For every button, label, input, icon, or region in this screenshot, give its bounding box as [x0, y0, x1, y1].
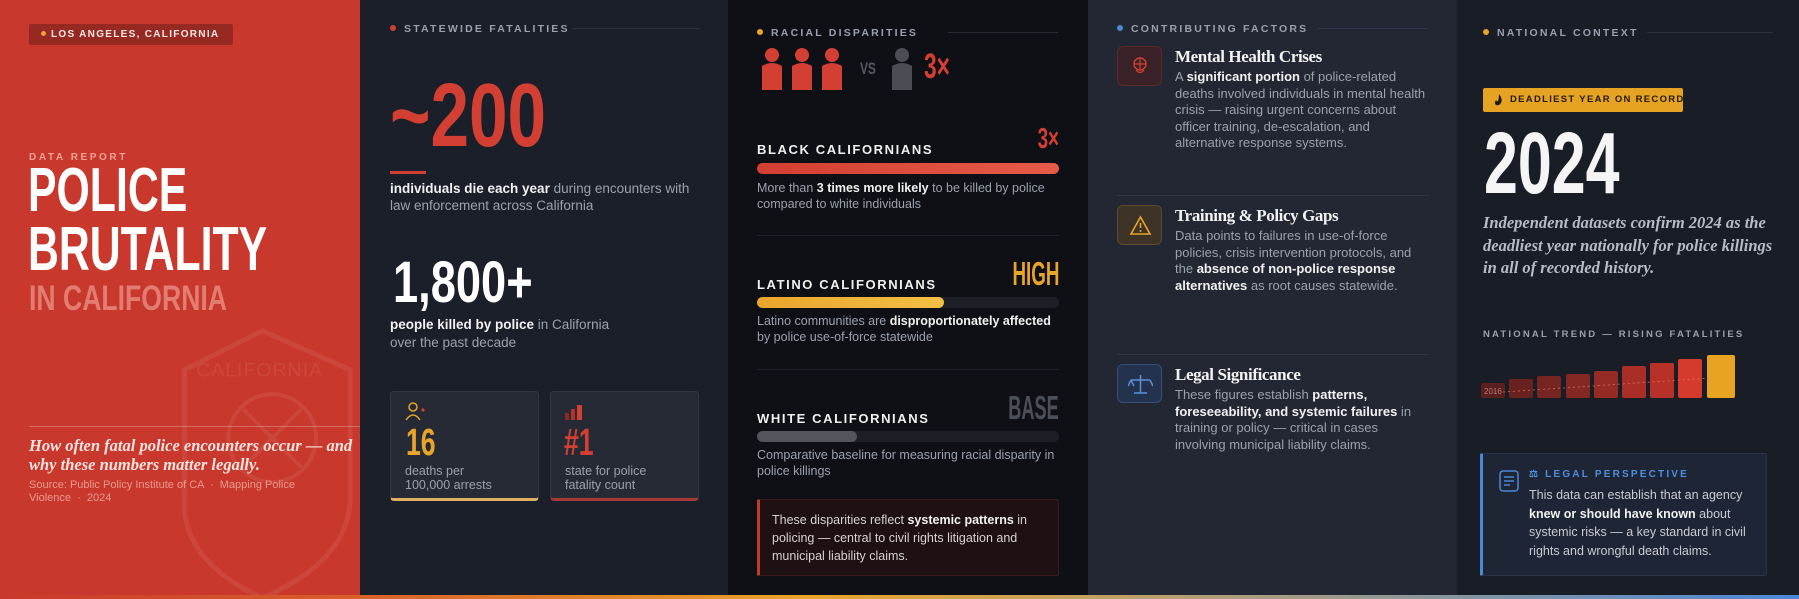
section label: STATEWIDE FATALITIES — [404, 23, 570, 35]
row: white californians: Comparative baseline for measuring racial disparity in police killings — [757, 448, 1054, 478]
badge: deadliest year: DEADLIEST YEAR ON RECORD — [1510, 94, 1685, 105]
icon: person — [405, 402, 425, 420]
stat description — [390, 317, 610, 350]
panel: national context — [1457, 0, 1799, 599]
big number ~200: ~200 — [390, 66, 546, 166]
section label: RACIAL DISPARITIES — [771, 27, 918, 39]
title — [28, 156, 267, 284]
row: latino californians: LATINO CALIFORNIANS — [757, 277, 937, 292]
icon: document — [1499, 470, 1519, 492]
icon: bars — [565, 405, 582, 420]
section label: CONTRIBUTING FACTORS — [1131, 23, 1308, 35]
callout: systemic patterns: These disparities reflect systemic patterns in policing — central to civil rights litigation and municipal liability claims. — [772, 513, 1027, 563]
tagline: How often fatal police encounters occur — and why these numbers matter legally. — [29, 436, 352, 474]
card: #1 state: state for police — [565, 464, 646, 478]
subtitle: IN CALIFORNIA — [29, 279, 227, 318]
stat description: people killed by police in California — [390, 317, 609, 332]
factor: training gaps — [1117, 205, 1411, 292]
title: BRUTALITY — [28, 215, 267, 284]
badge watermark: CALIFORNIA — [196, 360, 323, 382]
card: deaths per arrests: deaths per — [405, 464, 464, 478]
big number 1,800+: 1,800+ — [393, 250, 533, 315]
callout: legal perspective: This data can establish that an agency knew or should have known about systemic risks — a key standard in civil rights and wrongful death claims. — [1529, 488, 1746, 558]
panel: statewide fatalities — [360, 0, 728, 599]
factor: training gaps: Data points to failures in use-of-force policies, crisis intervention protocols, and the absence of non-police response alternatives as root causes statewide. — [1175, 228, 1411, 292]
icon: people comparison: 3× — [924, 47, 950, 86]
row: white californians — [757, 389, 1059, 478]
big number 2024: 2024 — [1484, 115, 1619, 212]
icon: people comparison: VS — [860, 60, 876, 79]
card: deaths per arrests — [390, 391, 539, 501]
factor: legal significance: Legal Significance — [1175, 365, 1300, 384]
panel: red title panel — [0, 0, 360, 599]
card: deaths per arrests: 16 — [406, 422, 436, 464]
stat description: individuals die each year during encounters with law enforcement across California — [390, 181, 689, 213]
row: latino californians: HIGH — [1012, 255, 1059, 292]
card: #1 state: #1 — [564, 422, 594, 464]
title: POLICE — [28, 156, 187, 225]
factor: legal significance — [1117, 364, 1411, 452]
factor: training gaps: Training & Policy Gaps — [1175, 206, 1338, 225]
location tag: LOS ANGELES, CALIFORNIA — [51, 29, 219, 40]
factor: legal significance: These figures establish patterns, foreseeability, and systemic failures in training or policy — critical in cases involving municipal liability claims. — [1175, 387, 1411, 452]
factor: mental health: Mental Health Crises — [1175, 47, 1322, 66]
row: black californians: BLACK CALIFORNIANS — [757, 142, 933, 157]
row: latino californians — [757, 255, 1059, 344]
chart label: NATIONAL TREND — RISING FATALITIES — [1483, 329, 1744, 340]
bottom gradient stripe — [0, 595, 1799, 599]
stat description: over the past decade — [390, 335, 516, 350]
factor: mental health — [1117, 46, 1425, 150]
card: deaths per arrests: 100,000 arrests — [405, 478, 492, 492]
callout: legal perspective: ⚖ LEGAL PERSPECTIVE — [1529, 469, 1689, 480]
badge: deadliest year — [1483, 88, 1683, 112]
row: latino californians: Latino communities are disproportionately affected by police use-of-force statewide — [757, 314, 1051, 344]
panel: contributing factors — [1088, 0, 1457, 599]
bar chart — [1481, 355, 1735, 398]
row: white californians: WHITE CALIFORNIANS — [757, 411, 930, 426]
row: black californians: More than 3 times more likely to be killed by police compared to white individuals — [757, 181, 1045, 211]
icon: people comparison — [762, 47, 950, 90]
section label: NATIONAL CONTEXT — [1497, 27, 1639, 39]
factor: mental health: A significant portion of police-related deaths involved individuals in mental health crisis — raising urgent concerns about officer training, de-escalation, and alternative response systems. — [1175, 69, 1425, 150]
italic description: Independent datasets confirm 2024 as the deadliest year nationally for police killings in all of recorded history. — [1483, 213, 1772, 277]
row: black californians: 3× — [1037, 123, 1059, 155]
icon: warning — [1117, 205, 1162, 245]
icon: brain — [1117, 46, 1162, 86]
source: Source: Public Policy Institute of CA · Mapping Police Violence · 2024 — [29, 479, 295, 504]
badge watermark — [182, 328, 352, 595]
data report label: DATA REPORT — [29, 152, 128, 163]
callout: legal perspective — [1480, 453, 1767, 576]
icon: scales — [1117, 364, 1162, 403]
card: #1 state — [550, 391, 699, 501]
panel: racial disparities — [728, 0, 1088, 599]
row: white californians: BASE — [1009, 389, 1059, 426]
row: black californians — [757, 123, 1059, 211]
location tag — [29, 24, 233, 45]
bar chart: 2016 — [1484, 387, 1502, 396]
card: #1 state: fatality count — [565, 478, 635, 492]
callout: systemic patterns — [757, 499, 1059, 576]
